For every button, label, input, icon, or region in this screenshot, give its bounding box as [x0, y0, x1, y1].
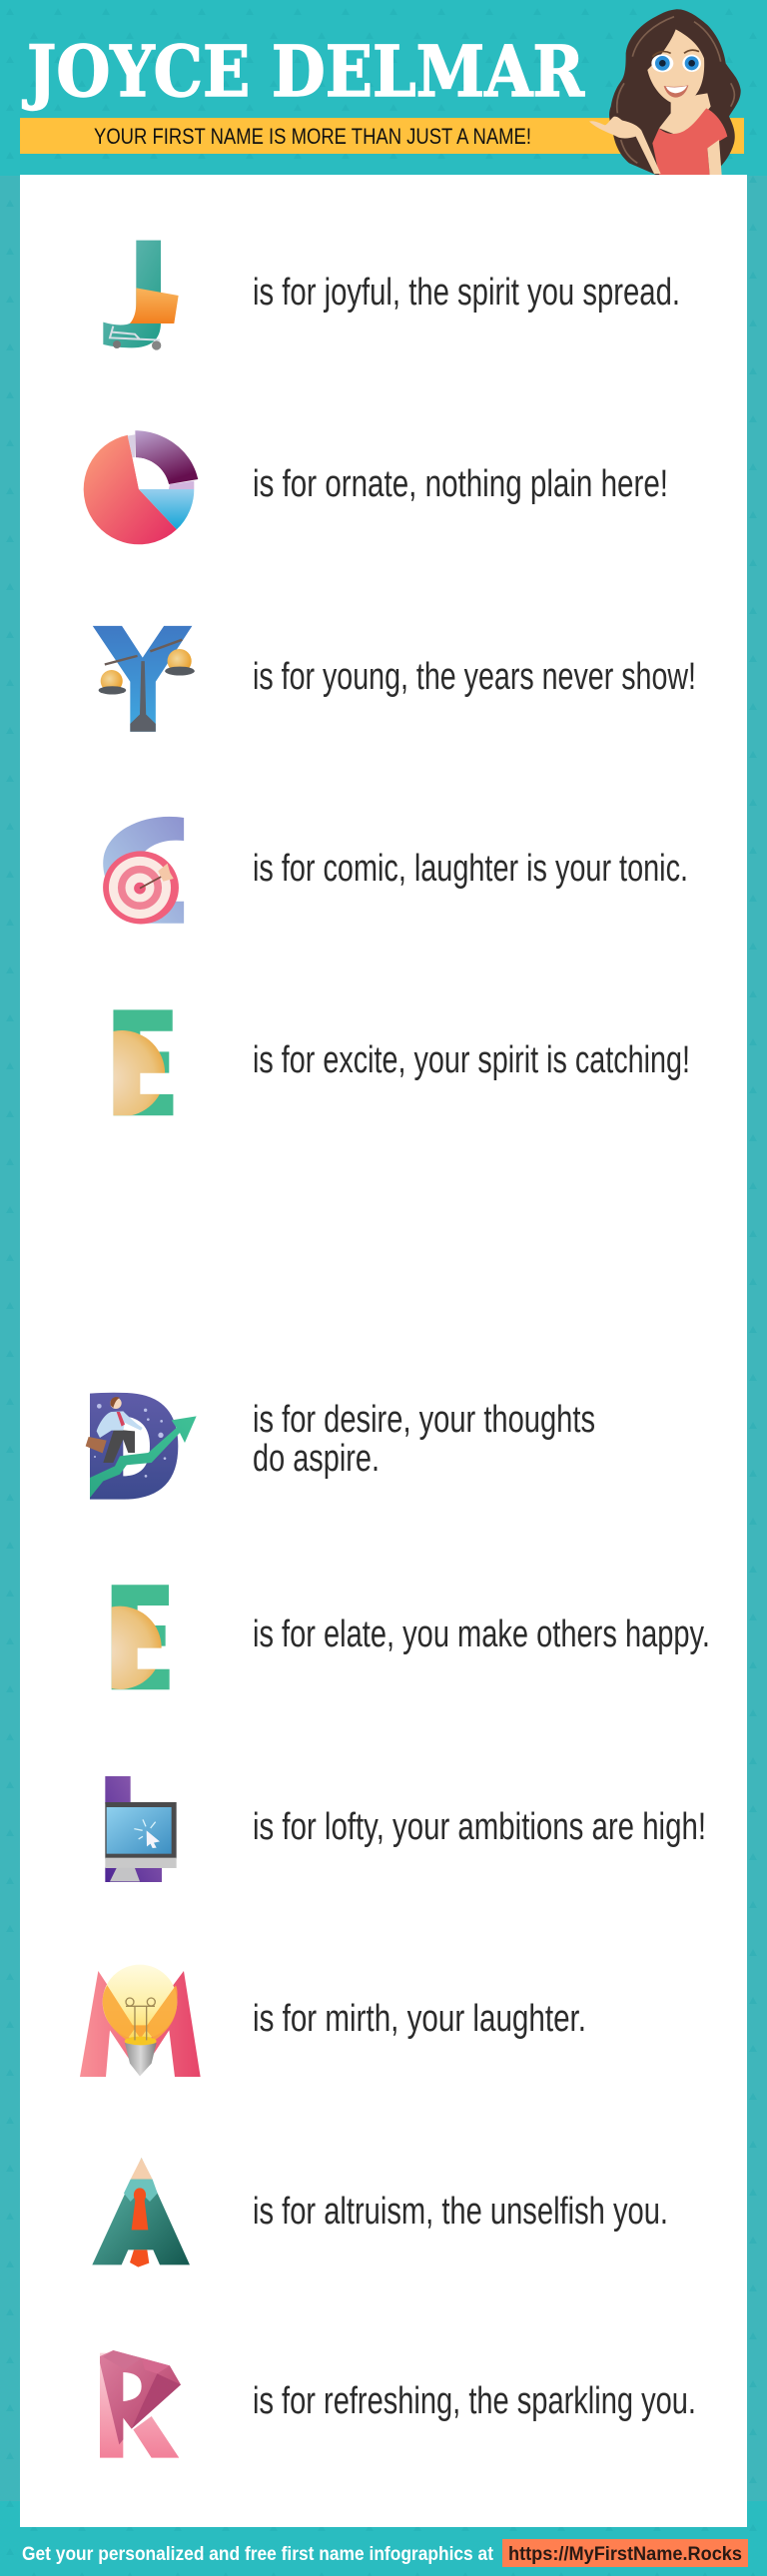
- subtitle banner: [20, 118, 744, 154]
- icon: letter C target: [103, 817, 184, 924]
- title: JOYCE DELMAR: [22, 30, 585, 113]
- icon: letter E moon: [112, 1585, 170, 1689]
- icon: letter A necktie: [92, 2158, 190, 2267]
- icon: letter M light bulb: [80, 1965, 201, 2077]
- icon: cartoon woman: [589, 9, 741, 175]
- row: E: [79, 1009, 690, 1116]
- icon: letter J shopping cart: [103, 241, 179, 350]
- row: C: [103, 817, 688, 924]
- icon: letter R gem: [100, 2350, 181, 2458]
- row: A: [92, 2158, 668, 2267]
- row: O: [84, 430, 668, 544]
- text: D: is for desire, your thoughts: [253, 1399, 595, 1441]
- icon: letter Y balance scale: [93, 626, 195, 732]
- icon: letter D businessman on arrow: [86, 1393, 197, 1500]
- row: D: [86, 1393, 595, 1500]
- row: L: [105, 1776, 706, 1882]
- footer text: Get your personalized and free first name infographics at: [22, 2544, 494, 2565]
- icon: letter E moon: [113, 1009, 174, 1116]
- text: M: is for mirth, your laughter.: [253, 1998, 586, 2040]
- text: D second line: do aspire.: [253, 1438, 380, 1480]
- row: Y: [93, 626, 696, 732]
- icon: letter O pie chart: [84, 430, 198, 544]
- subtitle banner: YOUR FIRST NAME IS MORE THAN JUST A NAME!: [94, 124, 531, 149]
- footer link badge: https://MyFirstName.Rocks: [508, 2544, 742, 2565]
- row: M: [80, 1965, 586, 2077]
- icon: letter L computer monitor: [105, 1776, 177, 1882]
- row: E second: [78, 1585, 710, 1689]
- row: R: [100, 2350, 696, 2458]
- row: J: [103, 241, 680, 350]
